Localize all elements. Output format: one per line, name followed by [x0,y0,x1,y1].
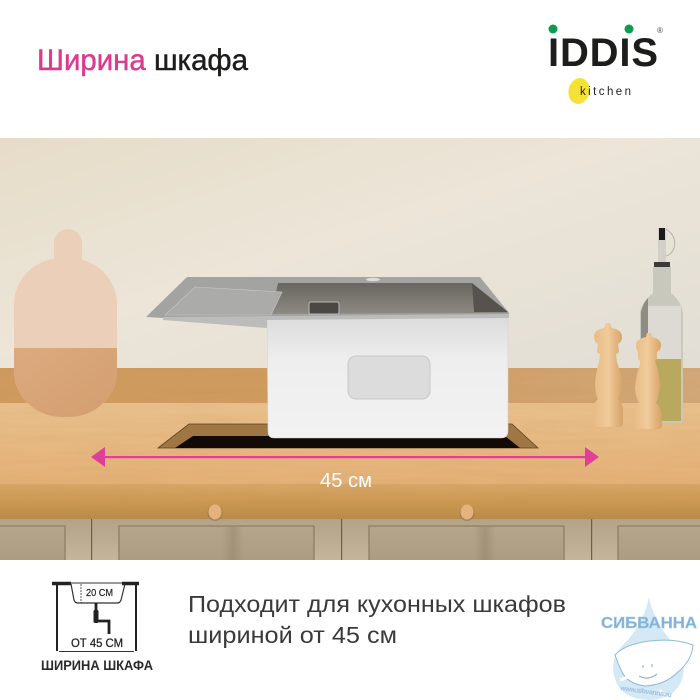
sink basin [271,283,508,314]
countertop front edge [0,484,700,520]
faucet hole [366,278,380,281]
logo: iddis kitchen: ® [657,26,663,35]
countertop line [71,582,122,584]
cabinet diagram icon [52,583,139,652]
overflow badge [309,302,339,314]
bathtub [615,640,693,686]
kitchen photo scene [0,138,700,566]
sink cutout in countertop [158,424,538,448]
wood grain overlay [0,368,700,520]
depth label: 20 СМ [86,588,113,599]
basin right wall [472,283,508,312]
wall [0,138,700,369]
countertop [0,403,700,485]
stainless steel sink [146,277,509,438]
logo: iddis kitchen: kitchen [580,86,631,98]
cabinet knobs [208,504,474,521]
logo: iddis kitchen: IDDIS [548,31,658,75]
flange top [146,277,509,318]
width label: ОТ 45 СМ [71,638,123,650]
sink body [267,318,508,438]
cutting board [14,229,117,418]
water drop [613,597,684,700]
width arrow [91,447,599,467]
wooden backsplash [0,368,700,404]
basin outline [71,584,125,603]
website: www.sibvanna.ru [619,685,672,699]
drainboard front edge [163,314,509,328]
description text: шириной от 45 см [188,622,397,648]
tub face [639,664,657,678]
description text: Подходит для кухонных шкафов [188,591,566,617]
brand name: СИБВАННА [601,615,697,632]
cabinet walls [57,584,136,651]
small pepper mill [633,333,662,429]
diagram caption: ШИРИНА ШКАФА [41,658,153,673]
cabinet doors [0,519,700,560]
trap body [94,610,98,623]
width dimension [59,650,134,652]
drainboard [165,287,282,315]
countertop flanges [52,582,139,585]
oil bottle [640,228,683,423]
title: Ширина шкафа [37,44,248,77]
tub feet [620,673,690,696]
watermark: sibvanna [601,597,697,700]
sink side plate [348,356,430,399]
pepper mills and oil bottle [593,228,683,429]
logo: iddis kitchen [548,24,663,106]
large pepper mill [593,323,623,427]
depth arrow [80,584,82,603]
drain trap [96,603,109,634]
width label: 45 см [320,470,372,492]
